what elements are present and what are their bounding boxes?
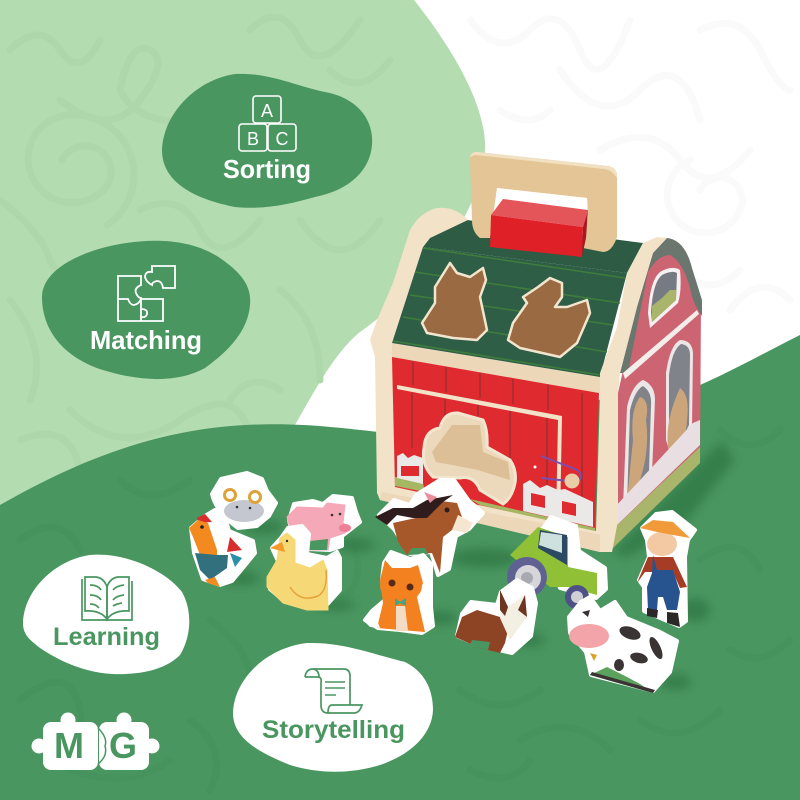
barn: rear roof	[423, 220, 643, 273]
label: Learning: Learning	[53, 623, 160, 651]
barn: cat shaped roof hole	[422, 263, 487, 340]
barn: duck shaped roof hole	[508, 278, 590, 357]
toy: dog	[455, 580, 536, 653]
icon: alphabet blocks: C	[276, 129, 288, 149]
white area squiggle pattern	[470, 19, 790, 310]
icon: alphabet blocks	[239, 96, 296, 151]
light green squiggle pattern	[0, 17, 390, 470]
barn: roof lines	[393, 248, 625, 375]
icon: alphabet blocks: A	[261, 101, 273, 121]
label: Sorting: Sorting	[223, 154, 311, 184]
toy: cow	[569, 597, 677, 693]
barn: fence and grass	[395, 453, 595, 531]
toy: sheep	[212, 473, 276, 528]
barn: shape hole in door	[423, 413, 515, 504]
logo: MG puzzle: M	[54, 725, 84, 766]
icon: alphabet blocks: B	[247, 129, 259, 149]
toy: cat	[363, 552, 433, 633]
barn: lower base shading	[380, 492, 603, 552]
barn: hole inner shadow	[432, 425, 510, 480]
toy: horse	[375, 480, 483, 575]
toy shadows	[220, 440, 735, 690]
barn: red handle block	[490, 199, 588, 257]
barn: green roof	[392, 247, 627, 377]
toy: duck	[267, 526, 340, 610]
barn: handle	[470, 152, 617, 252]
barn: side wall	[613, 238, 701, 548]
toy: farmer	[637, 512, 695, 627]
barn: front red wall	[392, 357, 599, 530]
icon: jigsaw puzzle	[118, 266, 175, 321]
icon: paper scroll	[305, 669, 362, 713]
icon: open book	[82, 577, 132, 620]
barn toy	[370, 152, 702, 552]
dark green squiggle pattern	[20, 430, 790, 790]
barn: front cream frame	[370, 208, 618, 552]
logo: MG puzzle: G	[109, 725, 137, 766]
barn: string and bead latch	[534, 456, 581, 488]
toy: tractor	[507, 517, 606, 609]
blob: Learning	[23, 555, 189, 674]
logo: MG puzzle	[32, 712, 160, 770]
blob: Storytelling	[233, 643, 433, 772]
background: dark green ground	[0, 335, 800, 800]
barn: sliding door frame	[397, 385, 562, 522]
blob: Sorting	[162, 74, 372, 208]
barn: front plank lines	[412, 362, 582, 524]
barn: side frame arch	[600, 237, 667, 552]
toy: pig	[287, 496, 360, 550]
label: Matching: Matching	[90, 325, 202, 355]
barn: side wall details	[612, 238, 702, 548]
barn: beam below roof	[392, 343, 618, 393]
blob: Matching	[42, 241, 250, 379]
background: light green shape	[0, 0, 485, 520]
label: Storytelling: Storytelling	[262, 716, 405, 744]
toy: rooster	[189, 510, 255, 587]
barn: handle opening	[496, 188, 588, 217]
